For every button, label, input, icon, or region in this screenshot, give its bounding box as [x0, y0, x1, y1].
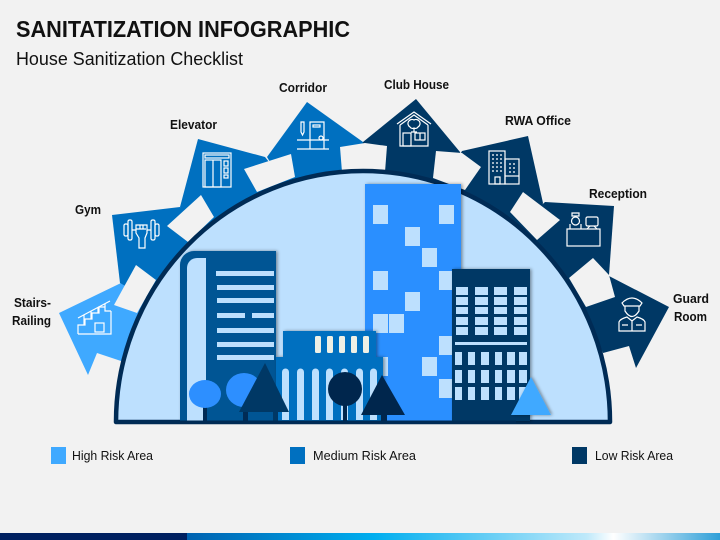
label: elevator: Elevator — [170, 117, 217, 132]
label: guard room: Guard — [673, 291, 709, 306]
label: reception: Reception — [589, 186, 647, 201]
label: stairs-railing: Railing — [12, 313, 51, 328]
label: gym: Gym — [75, 202, 101, 217]
dome base line — [116, 420, 516, 424]
icon: club house — [397, 112, 431, 146]
arrow: guard room — [580, 276, 669, 368]
gap: gym to elevator — [167, 195, 214, 242]
arrow: rwa office — [440, 136, 543, 245]
legend: high risk: High Risk Area — [72, 448, 154, 463]
tree: round blue large — [226, 373, 262, 422]
building: dark tower — [452, 269, 530, 421]
icon: corridor door — [297, 122, 329, 149]
legend: low risk — [572, 447, 674, 464]
legend: high risk — [51, 447, 154, 464]
building: tall blue tower — [365, 184, 461, 421]
gap: rwa office to reception — [510, 192, 560, 240]
tree: round blue small — [189, 380, 221, 422]
label: guard room: Room — [674, 309, 707, 324]
icon: elevator — [203, 153, 231, 187]
icon: guard — [619, 298, 645, 331]
title: SANITATIZATION INFOGRAPHIC — [16, 16, 350, 42]
label: guard room — [673, 291, 709, 324]
subtitle: House Sanitization Checklist — [16, 49, 243, 69]
building: low central block — [276, 331, 383, 421]
tree: triangle light blue — [511, 377, 551, 415]
label: corridor: Corridor — [279, 80, 327, 95]
tree: triangle navy — [239, 363, 289, 422]
dome — [116, 171, 610, 422]
tree: round dark — [328, 372, 362, 422]
icon: rwa building — [489, 151, 519, 184]
gap: club house to rwa office — [433, 151, 481, 190]
gap: corridor to club house — [340, 143, 387, 172]
tree: triangle dark — [361, 375, 405, 422]
label: club house: Club House — [384, 77, 449, 92]
icon: gym dumbbell — [124, 220, 159, 248]
footer bar — [0, 533, 720, 540]
arrow: corridor — [267, 102, 370, 195]
legend: low risk: Low Risk Area — [595, 448, 674, 463]
arrow: gym — [112, 207, 215, 300]
icon: stairs — [78, 301, 111, 334]
building: left office block — [180, 251, 276, 421]
label: stairs-railing — [12, 295, 51, 328]
gap: elevator to corridor — [244, 154, 295, 192]
gap: reception to guard room — [569, 258, 615, 307]
arrow: reception — [520, 202, 614, 320]
icon: reception desk — [567, 213, 600, 246]
arrow: stairs-railing — [59, 283, 160, 375]
label: rwa office: RWA Office — [505, 113, 571, 128]
label: stairs-railing: Stairs- — [14, 295, 51, 310]
arrow: elevator — [180, 139, 300, 240]
arrow: club house — [355, 99, 470, 200]
gap: stairs to gym — [114, 265, 156, 313]
legend: medium risk: Medium Risk Area — [313, 448, 417, 463]
